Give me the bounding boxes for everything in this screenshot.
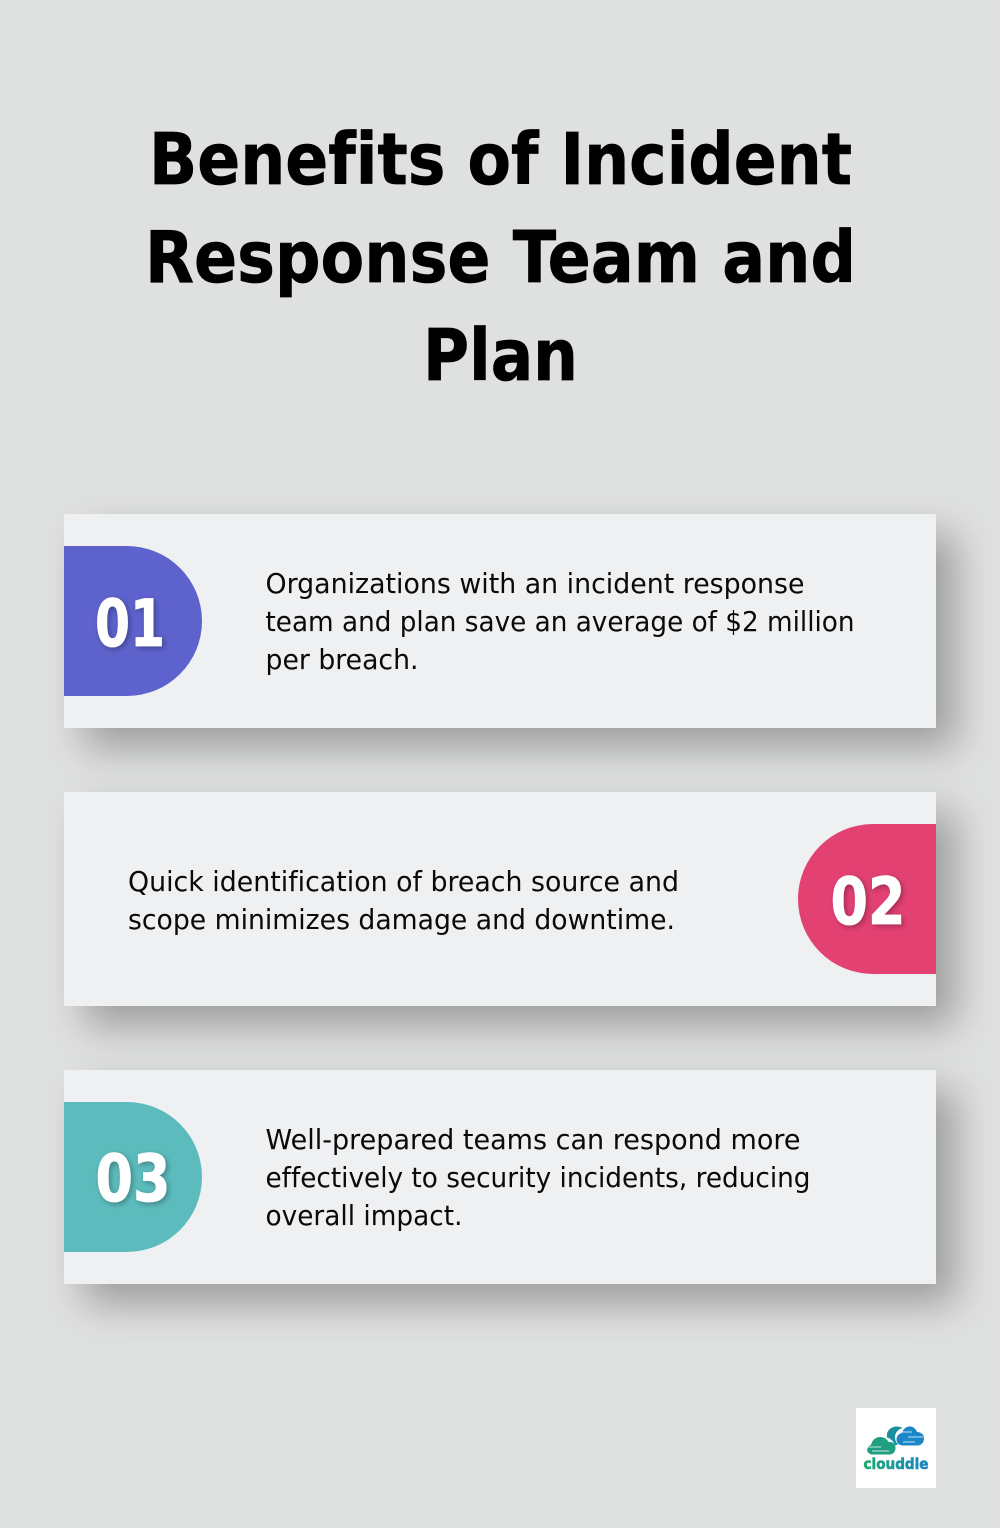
text: benefit 02 (128, 865, 679, 936)
text: benefit 02: Quick identification of breach source and (128, 865, 679, 898)
title: Response Team and (145, 216, 856, 299)
text: benefit 01: team and plan save an average of $2 million (266, 605, 854, 638)
card background 01 (64, 514, 936, 728)
number badge 02 (798, 824, 936, 974)
text: benefit 01: per breach. (266, 643, 418, 676)
panel: benefit 01 (64, 514, 936, 728)
text: benefit 03: effectively to security incidents, reducing (266, 1161, 810, 1194)
number badge 01 (64, 546, 202, 696)
number badge 03 (64, 1102, 202, 1252)
number 02: 02 (830, 865, 906, 940)
text: benefit 01: Organizations with an incident response (266, 567, 804, 600)
card background 03 (64, 1070, 936, 1284)
panel: benefit 02 (64, 792, 936, 1006)
title: Benefits of Incident (149, 118, 852, 201)
icon: clouds (867, 1426, 924, 1455)
logo wordmark: clouddle (864, 1455, 928, 1473)
logo: clouddle (856, 1408, 936, 1488)
title: Plan (423, 314, 578, 397)
text: benefit 02: scope minimizes damage and downtime. (128, 903, 675, 936)
text: benefit 03: overall impact. (266, 1199, 462, 1232)
panel: benefit 03 (64, 1070, 936, 1284)
text: benefit 03: Well-prepared teams can respond more (266, 1123, 800, 1156)
title (145, 118, 856, 397)
text: benefit 03 (266, 1123, 810, 1232)
card background 02 (64, 792, 936, 1006)
text: benefit 01 (266, 567, 854, 676)
number 01: 01 (95, 587, 165, 662)
number 03: 03 (96, 1142, 170, 1217)
logo background (856, 1408, 936, 1488)
